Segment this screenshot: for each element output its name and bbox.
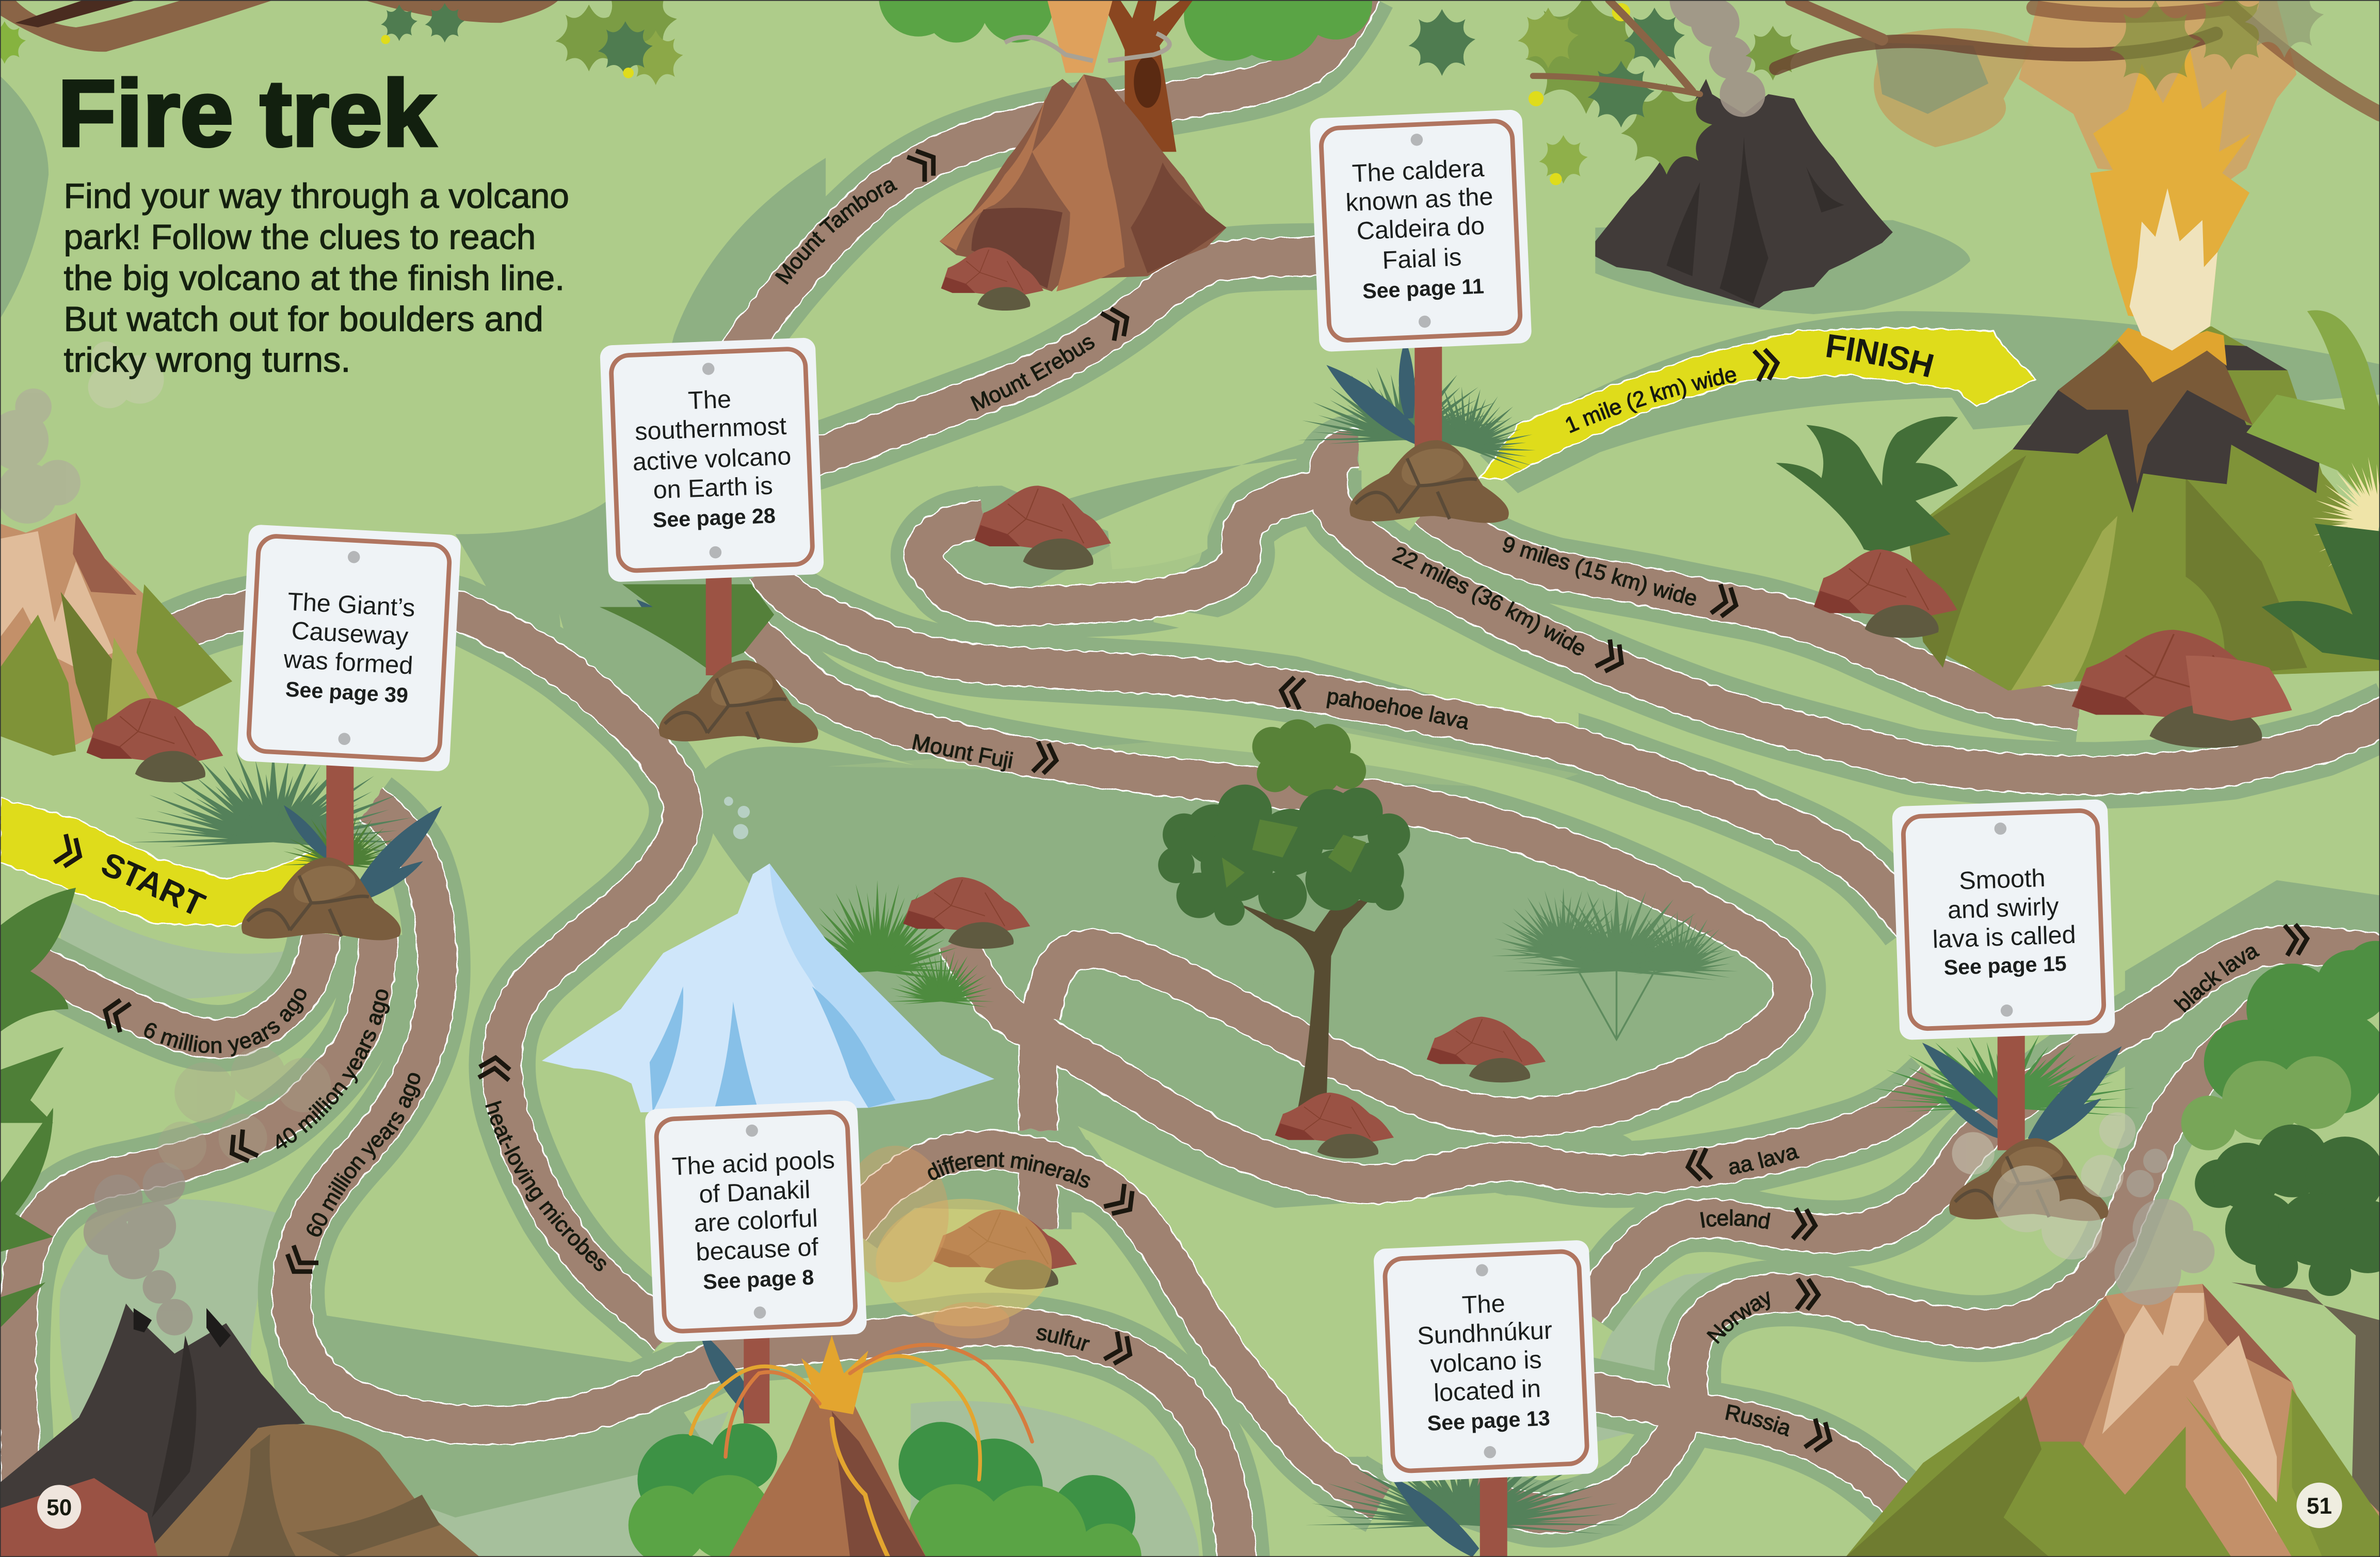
sign: Giant's Causeway: was formed bbox=[282, 645, 414, 680]
intro text: Find your way through a volcano bbox=[64, 177, 569, 216]
spiky blue leaves bbox=[275, 339, 2122, 1557]
intro text: the big volcano at the finish line. bbox=[64, 259, 565, 298]
sign: southernmost volcano: southernmost bbox=[634, 412, 787, 446]
sign: Giant's Causeway: The Giant’s bbox=[287, 588, 416, 622]
sign: smooth lava: Smooth bbox=[1958, 864, 2046, 895]
label: heat-loving microbes: heat-loving microbes bbox=[480, 1098, 613, 1276]
intro text: tricky wrong turns. bbox=[64, 341, 350, 380]
road labels bbox=[54, 145, 2308, 1454]
top right foliage bbox=[1409, 0, 1800, 185]
sign: Danakil: are colorful bbox=[694, 1204, 818, 1238]
label: aa lava: aa lava bbox=[1729, 1147, 1800, 1175]
volcano: bottom left dark bbox=[0, 1162, 479, 1557]
top right branches bbox=[1533, 0, 2380, 114]
right trees bbox=[2181, 941, 2380, 1517]
volcano: left tan volcano bbox=[0, 342, 232, 756]
label: 1 mile bbox=[1562, 348, 1779, 438]
page number 51 bbox=[2296, 1483, 2342, 1528]
label: 40 million years ago bbox=[224, 986, 394, 1166]
sign: southernmost volcano: The bbox=[687, 385, 732, 415]
green bushes beside lava volcano bbox=[629, 1422, 1141, 1557]
label: different minerals bbox=[922, 1147, 1140, 1221]
label: 40 million years ago: 40 million years ago bbox=[268, 986, 394, 1156]
label: 60 million years ago: 60 million years ago bbox=[301, 1069, 426, 1241]
label: START: START bbox=[102, 854, 207, 914]
label: 22 miles: 22 miles (36 km) wide bbox=[1391, 547, 1584, 655]
boulders at sign bases bbox=[242, 440, 2109, 1221]
plants right of big volcano bbox=[2246, 310, 2380, 660]
sign: caldera: known as the bbox=[1345, 183, 1493, 217]
sign: Sundhnukur bbox=[1373, 1240, 1599, 1483]
sign: caldera: See page 11 bbox=[1362, 274, 1485, 303]
tree behind central volcano bbox=[879, 0, 1372, 152]
sign: caldera: The caldera bbox=[1352, 154, 1485, 188]
label: aa lava bbox=[1685, 1139, 1801, 1182]
label: Iceland bbox=[1698, 1206, 1817, 1241]
label: START bbox=[54, 834, 211, 924]
sign: Giant's Causeway bbox=[237, 524, 461, 772]
volcano: Mount Tambora brown bbox=[940, 0, 1227, 291]
sign: caldera: Faial is bbox=[1382, 243, 1462, 274]
smoke over forty million road bbox=[158, 1047, 331, 1170]
light clearings between roads bbox=[827, 471, 1589, 1457]
label: 1 mile: 1 mile (2 km) wide bbox=[1566, 368, 1736, 433]
sign: Sundhnukur: Sundhnúkur bbox=[1417, 1317, 1553, 1350]
volcano: Mount Erebus dark bbox=[1595, 0, 1893, 308]
title: Fire trek bbox=[58, 60, 436, 166]
label: sulfur: sulfur bbox=[1034, 1320, 1092, 1357]
label: Mount Fuji: Mount Fuji bbox=[912, 734, 1014, 772]
sign: Danakil: of Danakil bbox=[698, 1176, 811, 1208]
volcano: bottom right tan volcano bbox=[1846, 1149, 2380, 1557]
sign: Giant's Causeway: See page 39 bbox=[285, 677, 409, 707]
sign: Danakil: because of bbox=[695, 1233, 819, 1267]
sign posts bbox=[326, 342, 2025, 1557]
sign: southernmost volcano: active volcano bbox=[632, 442, 792, 476]
sign: southernmost volcano: on Earth is bbox=[653, 472, 773, 504]
volcano: orange lava volcano bbox=[690, 1335, 1032, 1557]
label: 9 miles: 9 miles (15 km) wide bbox=[1503, 537, 1696, 606]
label: Norway: Norway bbox=[1706, 1291, 1770, 1344]
volcano: blue snow volcano bbox=[542, 797, 994, 1112]
top left branches bbox=[0, 0, 558, 64]
label: Norway bbox=[1702, 1279, 1819, 1349]
sign: Danakil: The acid pools bbox=[671, 1146, 835, 1181]
label: pahoehoe lava bbox=[1279, 675, 1472, 735]
red rocks bbox=[87, 248, 2292, 1290]
label: Russia: Russia bbox=[1723, 1400, 1794, 1441]
intro text: But watch out for boulders and bbox=[64, 300, 543, 338]
sign: Sundhnukur: The bbox=[1461, 1290, 1506, 1319]
palm fans bbox=[129, 364, 2140, 1534]
label: black lava bbox=[2170, 923, 2308, 1017]
sign: Danakil: See page 8 bbox=[702, 1266, 814, 1294]
sign: Giant's Causeway: Causeway bbox=[291, 617, 409, 651]
sign: southernmost volcano: See page 28 bbox=[652, 504, 776, 532]
volcano: big erupting volcano at finish bbox=[1874, 0, 2380, 690]
sign: Sundhnukur: See page 13 bbox=[1427, 1406, 1550, 1435]
intro text bbox=[64, 177, 569, 380]
label: Russia bbox=[1723, 1400, 1835, 1454]
green leaves at southern sign bbox=[600, 585, 774, 668]
label: Mount Fuji bbox=[910, 729, 1059, 775]
sign: smooth lava: See page 15 bbox=[1943, 951, 2067, 980]
fern near finish bbox=[1776, 416, 1958, 554]
label: Iceland: Iceland bbox=[1700, 1209, 1771, 1229]
page number 50: 50 bbox=[46, 1495, 72, 1520]
intro text: park! Follow the clues to reach bbox=[64, 218, 536, 256]
label: different minerals: different minerals bbox=[922, 1147, 1095, 1194]
label: Mount Tambora: Mount Tambora bbox=[775, 180, 898, 285]
sign: southernmost volcano bbox=[600, 337, 824, 582]
sign: caldera: Caldeira do bbox=[1356, 212, 1485, 245]
central tree bbox=[1158, 719, 1410, 1123]
label: Mount Erebus: Mount Erebus bbox=[970, 337, 1095, 412]
sign: Sundhnukur: volcano is bbox=[1430, 1345, 1542, 1378]
smoke around sign five bbox=[1952, 1112, 2135, 1259]
page number 51: 51 bbox=[2307, 1494, 2332, 1519]
top left foliage bbox=[381, 0, 683, 85]
label: FINISH: FINISH bbox=[1826, 334, 1934, 378]
page number 50 bbox=[37, 1485, 81, 1529]
sign: Danakil bbox=[645, 1100, 867, 1343]
foliage tinted by eruption bbox=[2110, 0, 2324, 91]
sign: smooth lava bbox=[1892, 799, 2115, 1040]
sign: smooth lava: and swirly bbox=[1947, 893, 2060, 924]
rock in front of tree bbox=[1275, 1093, 1394, 1158]
label: sulfur bbox=[1034, 1320, 1136, 1368]
sign: caldera bbox=[1310, 109, 1532, 352]
label: Mount Erebus bbox=[967, 304, 1133, 416]
label: 6 million years ago: 6 million years ago bbox=[139, 983, 313, 1058]
label: black lava: black lava bbox=[2174, 946, 2260, 1013]
sign: smooth lava: lava is called bbox=[1932, 921, 2076, 953]
left edge leaves bbox=[0, 888, 76, 1328]
sulfur glow over road bbox=[842, 1146, 1052, 1338]
label: Mount Tambora bbox=[770, 145, 942, 289]
lighter ground shapes bbox=[59, 895, 2080, 1557]
label: pahoehoe lava: pahoehoe lava bbox=[1326, 691, 1468, 729]
sign: Sundhnukur: located in bbox=[1433, 1374, 1541, 1407]
